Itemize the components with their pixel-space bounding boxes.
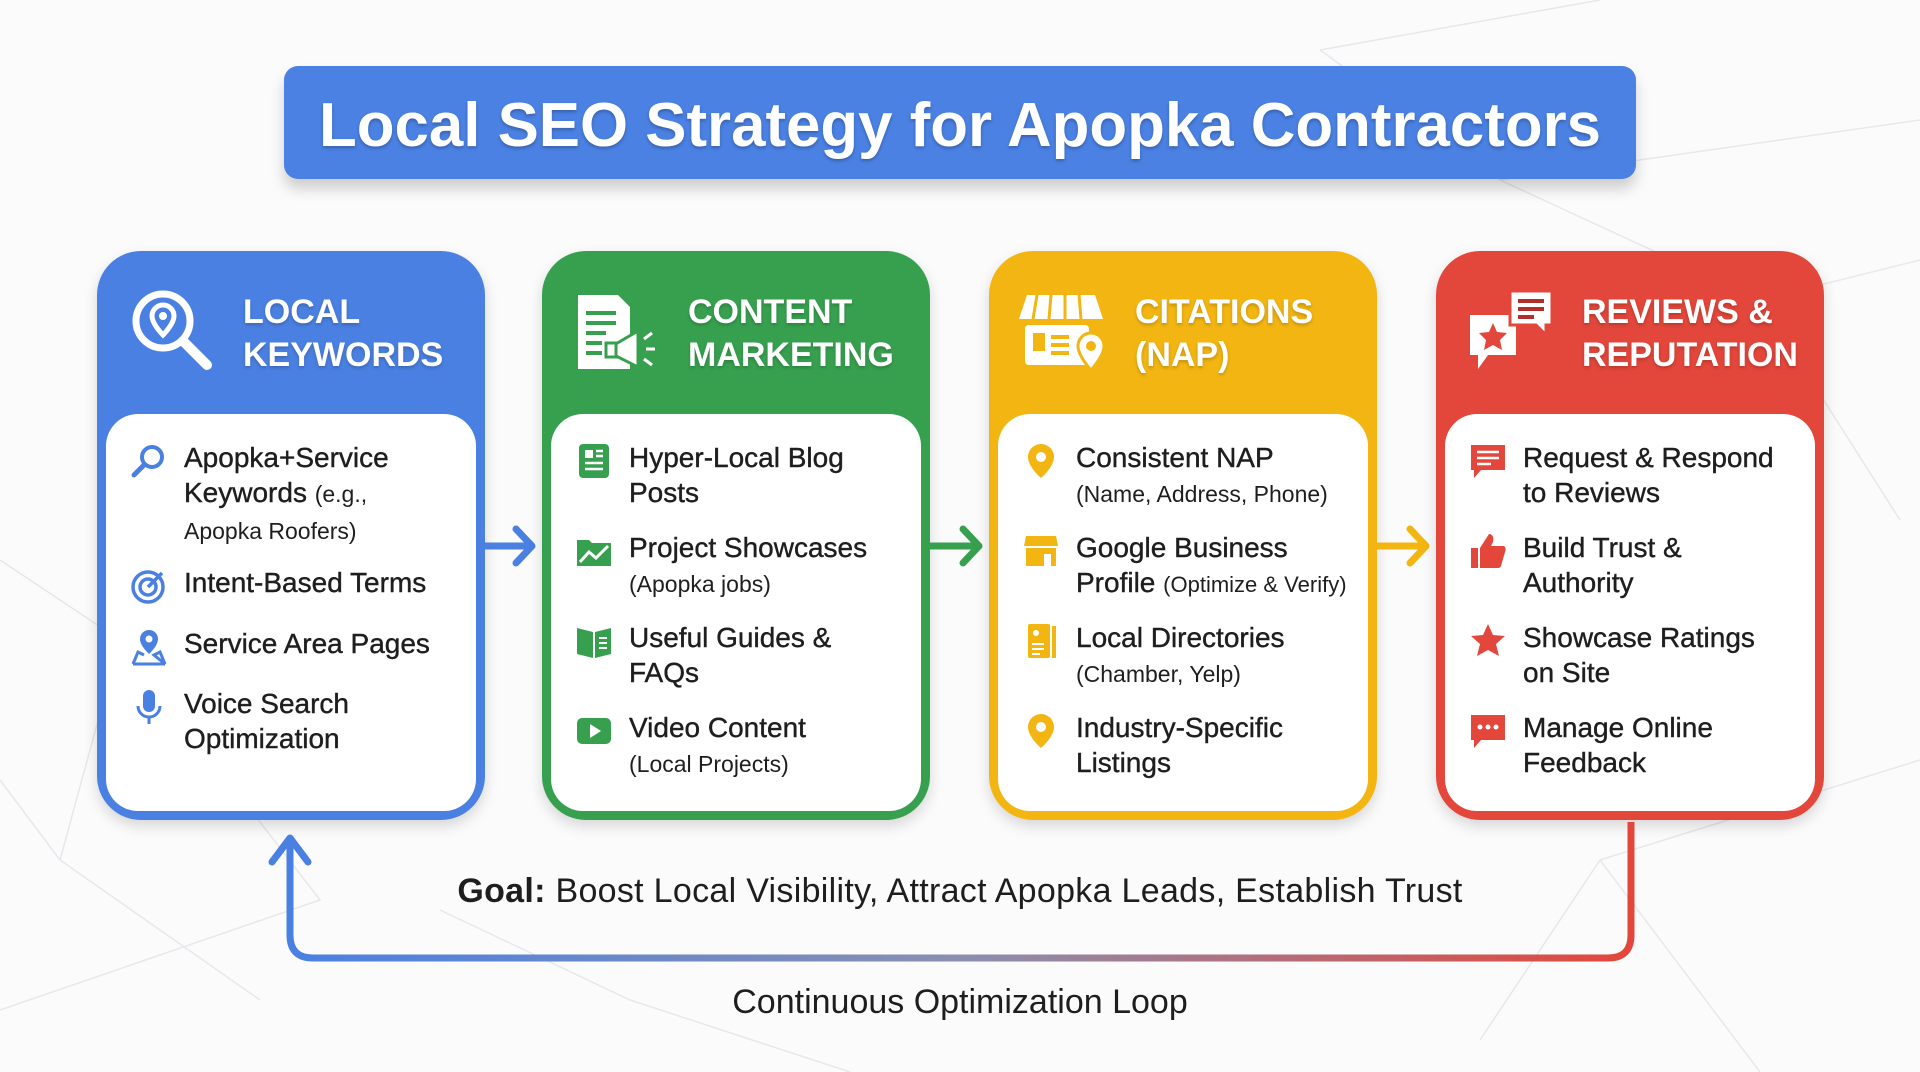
panel: content marketing: Posts (629, 477, 699, 508)
panel: reviews: on Site (1523, 657, 1610, 688)
panel: content marketing: Project Showcases (629, 532, 867, 563)
icon: storefront with pin (1019, 295, 1103, 368)
item (136, 688, 349, 754)
panel: content marketing: Hyper-Local Blog (629, 442, 844, 473)
panel: citations: Consistent NAP (1076, 442, 1274, 473)
heading (688, 293, 894, 374)
icon: map pin magnifier (132, 290, 212, 370)
arrow (1377, 526, 1430, 566)
heading: KEYWORDS (243, 336, 443, 374)
item (132, 628, 430, 666)
title banner: Local SEO Strategy for Apopka Contractors (319, 91, 1601, 160)
panel: content marketing: Video Content (629, 712, 806, 743)
heading: REVIEWS & (1582, 293, 1773, 331)
panel: local keywords (97, 251, 485, 820)
panel: citations: (Name, Address, Phone) (1076, 481, 1328, 507)
panel: citations: (Chamber, Yelp) (1076, 661, 1241, 687)
panel: local keywords: Intent-Based Terms (184, 567, 426, 598)
panel: citations: Profile (Optimize & Verify) (1076, 567, 1347, 598)
panel: content marketing (542, 251, 930, 820)
panel: content marketing: Useful Guides & (629, 622, 831, 653)
heading: (NAP) (1135, 336, 1229, 374)
arrow (930, 526, 982, 566)
item (579, 442, 844, 508)
panel: content marketing: (Local Projects) (629, 751, 789, 777)
goal text: Goal: Boost Local Visibility, Attract Apopka Leads, Establish Trust (457, 872, 1463, 910)
item (1028, 712, 1283, 778)
title banner (284, 66, 1636, 179)
panel: reviews: Request & Respond (1523, 442, 1774, 473)
panel: local keywords: Service Area Pages (184, 628, 430, 659)
panel: local keywords: Voice Search (184, 688, 349, 719)
panel: reviews: Manage Online (1523, 712, 1713, 743)
panel: reviews: Build Trust & (1523, 532, 1682, 563)
item (1471, 442, 1774, 508)
panel: reviews: Authority (1523, 567, 1634, 598)
item (1028, 622, 1285, 687)
heading (1582, 293, 1798, 374)
heading (1135, 293, 1313, 376)
item (577, 532, 867, 597)
panel: reviews (1436, 251, 1824, 820)
item (1471, 712, 1713, 778)
panel: citations (989, 251, 1377, 820)
panel: content marketing: FAQs (629, 657, 699, 688)
panel: citations: Local Directories (1076, 622, 1285, 653)
panel: local keywords: Apopka+Service (184, 442, 389, 473)
icon: document megaphone (578, 295, 655, 369)
panel: local keywords: Optimization (184, 723, 340, 754)
panel: citations: Google Business (1076, 532, 1288, 563)
item (1471, 622, 1755, 688)
panel: reviews: to Reviews (1523, 477, 1660, 508)
heading: REPUTATION (1582, 336, 1798, 374)
item (1024, 532, 1347, 598)
heading (243, 293, 443, 374)
panel: local keywords: Apopka Roofers) (184, 518, 357, 544)
icon: chat bubbles star (1470, 292, 1550, 369)
item (577, 622, 832, 688)
panel: citations: Listings (1076, 747, 1171, 778)
panel: content marketing: (Apopka jobs) (629, 571, 771, 597)
arrow (485, 526, 536, 566)
item (131, 567, 426, 604)
panel: reviews: Feedback (1523, 747, 1646, 778)
panel: citations: Industry-Specific (1076, 712, 1283, 743)
heading: MARKETING (688, 336, 894, 374)
heading: CITATIONS (1135, 293, 1313, 331)
item (132, 442, 389, 544)
loop label: Continuous Optimization Loop (732, 983, 1188, 1021)
panel: reviews: Showcase Ratings (1523, 622, 1755, 653)
panel: local keywords: Keywords (e.g., (184, 477, 367, 508)
heading: CONTENT (688, 293, 852, 331)
heading: LOCAL (243, 293, 360, 331)
item (577, 712, 806, 777)
item (1471, 532, 1682, 598)
item (1028, 442, 1328, 507)
